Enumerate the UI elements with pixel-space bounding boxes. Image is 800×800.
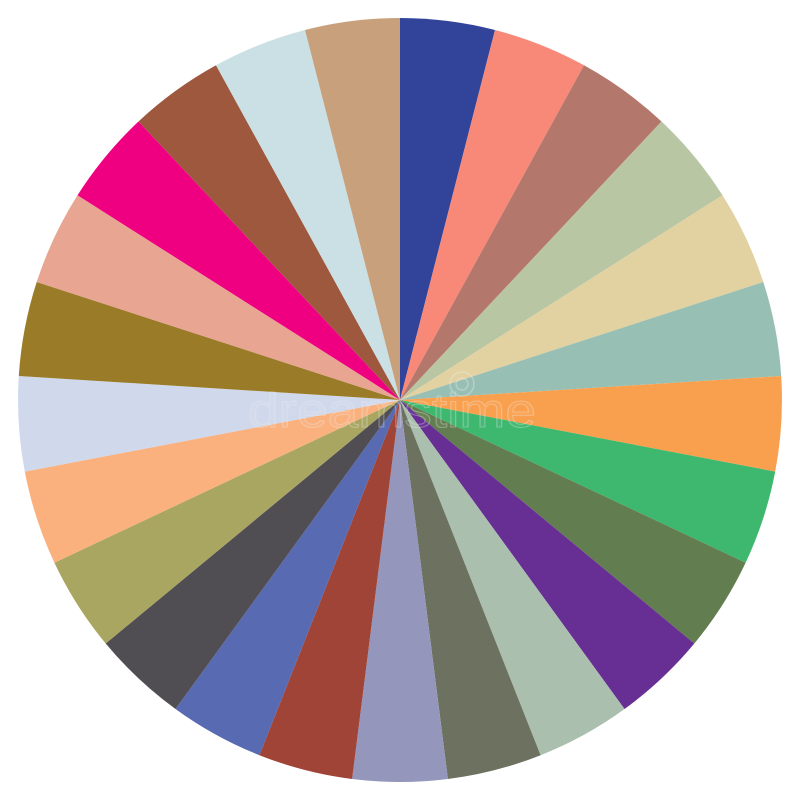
wedge 25: tan: [305, 18, 400, 400]
wedge 11: light sage: [400, 400, 624, 755]
wedge 6: grey teal: [400, 282, 781, 400]
wedge 14: brick red: [259, 400, 400, 779]
wedge 22: magenta: [78, 122, 400, 400]
wedge 20: golden brown: [19, 282, 400, 400]
wedge 16: charcoal: [106, 400, 400, 709]
wedge 2: salmon: [400, 30, 584, 400]
wedge 3: rosy brown: [400, 65, 662, 400]
wedge 5: cream: [400, 195, 763, 400]
wedge 1: navy blue: [400, 18, 495, 400]
wedge 24: pale blue: [216, 30, 400, 400]
wedge 23: sienna: [138, 65, 400, 400]
wedge 13: periwinkle grey: [352, 400, 448, 782]
wedge 17: olive: [54, 400, 400, 644]
wedge 12: grey green: [400, 400, 541, 779]
wedge 4: sage: [400, 122, 722, 400]
wedge 7: orange: [400, 376, 782, 472]
wedge 15: mid blue: [176, 400, 400, 755]
wedge 21: light pink: [37, 195, 400, 400]
wedge 8: green: [400, 400, 775, 563]
watermark swirl icon: [450, 372, 474, 396]
watermark text: dreamstime: [248, 385, 536, 438]
watermark: [248, 372, 536, 438]
wedge 9: dark green: [400, 400, 746, 644]
wedge 19: pale lavender blue: [18, 376, 400, 472]
wedge 10: purple: [400, 400, 694, 709]
wedge 18: peach: [25, 400, 400, 563]
